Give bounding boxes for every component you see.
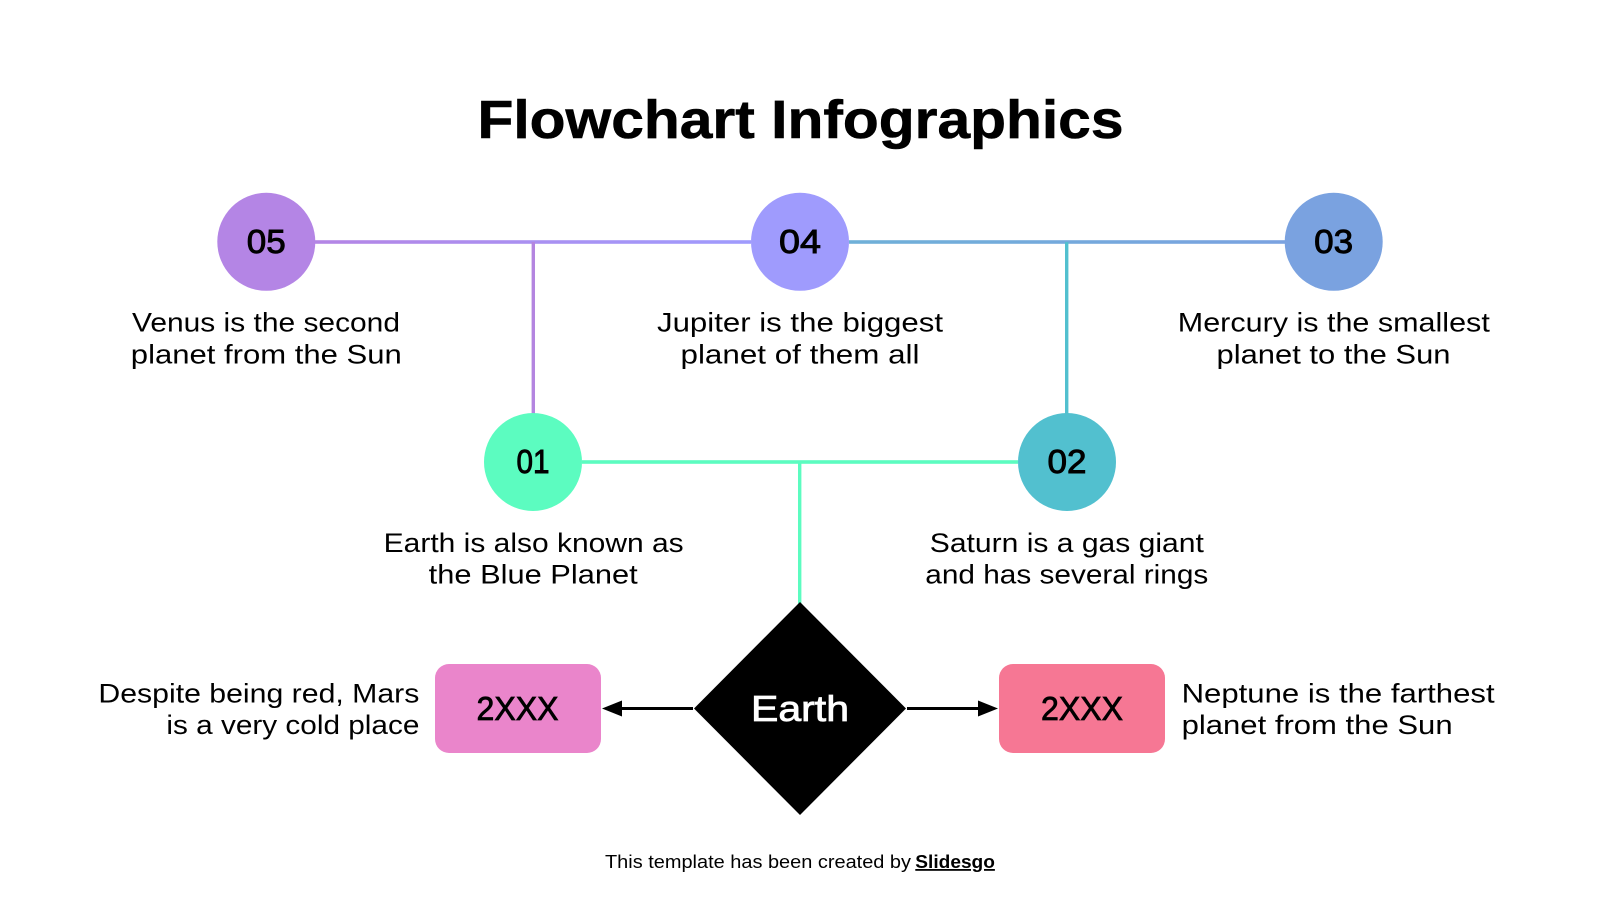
node 02: 02: [1048, 443, 1086, 480]
text: Venus: planet from the Sun: [131, 340, 402, 370]
connector: 05 to 04: [315, 240, 751, 244]
arrow: left: [602, 700, 693, 716]
node 04: 04: [779, 223, 821, 260]
decision diamond: Earth: Earth: [751, 688, 849, 729]
node 05: 05: [247, 223, 286, 260]
connector: 04 to 03: [849, 240, 1285, 244]
decision diamond: Earth: [694, 602, 906, 815]
text: Mars: [98, 678, 419, 740]
node 01: [484, 413, 582, 511]
node 02: [1018, 413, 1116, 511]
box: left 2XXX: [435, 664, 601, 753]
connector: top line to 01: [532, 242, 535, 414]
text: Saturn: [925, 528, 1208, 590]
connector: top line to 02: [1065, 242, 1068, 414]
connector: 01 to 02: [582, 460, 1018, 464]
node 01: 01: [516, 443, 550, 480]
text: Mars: Despite being red, Mars: [98, 678, 419, 708]
text: Earth: the Blue Planet: [429, 560, 638, 590]
text: Jupiter: planet of them all: [680, 340, 920, 370]
text: Saturn: and has several rings: [925, 560, 1208, 590]
box: right 2XXX: [999, 664, 1165, 753]
text: Neptune: Neptune is the farthest: [1182, 678, 1495, 708]
footer credit: Slidesgo: [915, 852, 995, 872]
box: right 2XXX: 2XXX: [1041, 690, 1123, 727]
text: Mars: is a very cold place: [166, 710, 419, 740]
node 05: [217, 193, 315, 291]
text: Mercury: [1178, 308, 1491, 370]
text: Neptune: [1182, 678, 1495, 740]
text: Saturn: Saturn is a gas giant: [930, 528, 1205, 558]
text: Jupiter: [657, 308, 944, 370]
arrow: right: [907, 700, 998, 716]
text: Earth: [384, 528, 684, 590]
footer credit: This template has been created by: [605, 852, 911, 872]
node 03: 03: [1314, 223, 1353, 260]
connector: 01-02 line to diamond: [798, 462, 801, 606]
node 04: [751, 193, 849, 291]
node 03: [1285, 193, 1383, 291]
text: Mercury: planet to the Sun: [1216, 340, 1450, 370]
text: Venus: Venus is the second: [132, 308, 400, 338]
text: Mercury: Mercury is the smallest: [1178, 308, 1491, 338]
text: Jupiter: Jupiter is the biggest: [657, 308, 944, 338]
text: Earth: Earth is also known as: [384, 528, 684, 558]
box: left 2XXX: 2XXX: [476, 690, 558, 727]
title: Flowchart Infographics: [478, 90, 1124, 150]
text: Venus: [131, 308, 402, 370]
text: Neptune: planet from the Sun: [1182, 710, 1453, 740]
